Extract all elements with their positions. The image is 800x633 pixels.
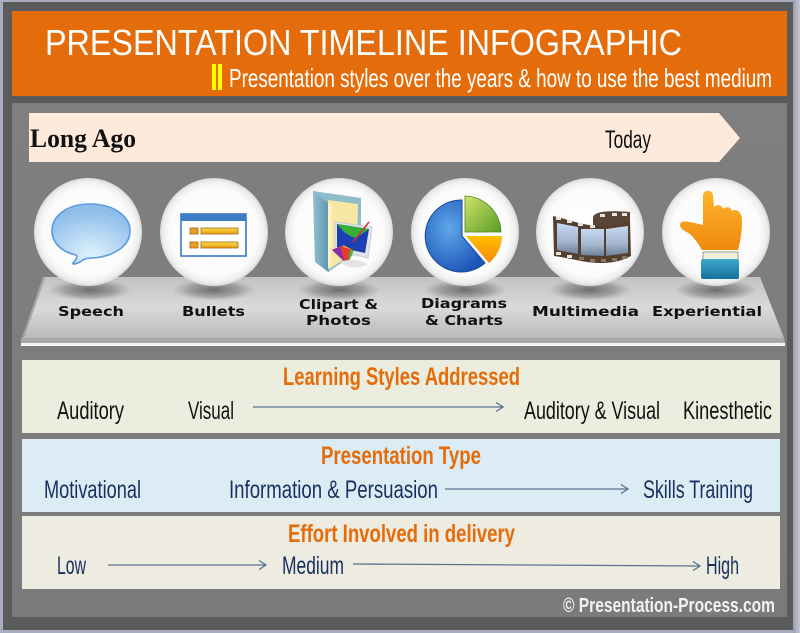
label: clipart and photos: Clipart & — [299, 297, 378, 313]
items: Auditory & Visual — [524, 397, 660, 425]
items: Visual — [188, 397, 234, 425]
ball shadows — [48, 279, 758, 301]
icon: pie chart — [425, 196, 502, 272]
items: High — [706, 552, 739, 580]
items: Auditory — [57, 397, 124, 425]
items: Low — [57, 552, 87, 580]
label: diagrams and charts: & Charts — [425, 313, 503, 329]
multimedia item — [536, 178, 644, 286]
label: today: Today — [605, 126, 651, 154]
ball — [285, 178, 393, 286]
items: Skills Training — [643, 476, 753, 504]
bullets item — [160, 178, 268, 286]
label: speech: Speech — [58, 304, 124, 320]
icon: yellow double bar — [212, 64, 222, 90]
panel: effort involved — [22, 516, 780, 589]
header banner — [12, 11, 787, 96]
label: diagrams and charts: Diagrams — [421, 296, 507, 312]
label: experiential: Experiential — [652, 304, 762, 320]
platform — [21, 277, 785, 346]
ball — [662, 178, 770, 286]
diagrams item — [411, 178, 519, 286]
label: long ago: Long Ago — [30, 124, 136, 153]
inner grey panel — [12, 103, 787, 617]
icon: speech bubble — [52, 204, 130, 264]
items — [44, 476, 753, 504]
label: bullets: Bullets — [182, 304, 245, 320]
icon: folder with art — [313, 191, 372, 272]
label: multimedia: Multimedia — [532, 304, 639, 320]
items — [57, 552, 739, 580]
panel: presentation type — [22, 439, 780, 512]
clipart item — [285, 178, 393, 286]
arrow: medium to high — [353, 562, 700, 570]
items: Motivational — [44, 476, 141, 504]
items — [57, 397, 772, 425]
arrow — [253, 402, 503, 412]
heading: Presentation Type — [321, 442, 481, 470]
ball — [34, 178, 142, 286]
experiential item — [662, 178, 770, 286]
heading: Effort Involved in delivery — [288, 520, 515, 548]
ball — [536, 178, 644, 286]
timeline arrow — [29, 113, 740, 162]
icon: bullet window — [181, 214, 246, 256]
arrow — [445, 484, 628, 494]
label: clipart and photos — [299, 297, 378, 329]
speech item — [34, 178, 142, 286]
ball — [411, 178, 519, 286]
label: clipart and photos: Photos — [306, 313, 371, 329]
label: diagrams and charts — [421, 296, 507, 329]
arrow: low to medium — [108, 560, 266, 570]
icon: film strip — [553, 211, 631, 263]
ball — [160, 178, 268, 286]
title: PRESENTATION TIMELINE INFOGRAPHIC — [45, 22, 682, 63]
icon: pointing hand — [680, 191, 742, 279]
heading: Learning Styles Addressed — [283, 363, 520, 391]
items: Information & Persuasion — [229, 476, 438, 504]
items: Medium — [282, 552, 344, 580]
right page edge — [793, 0, 800, 633]
panel: learning styles — [22, 360, 780, 433]
